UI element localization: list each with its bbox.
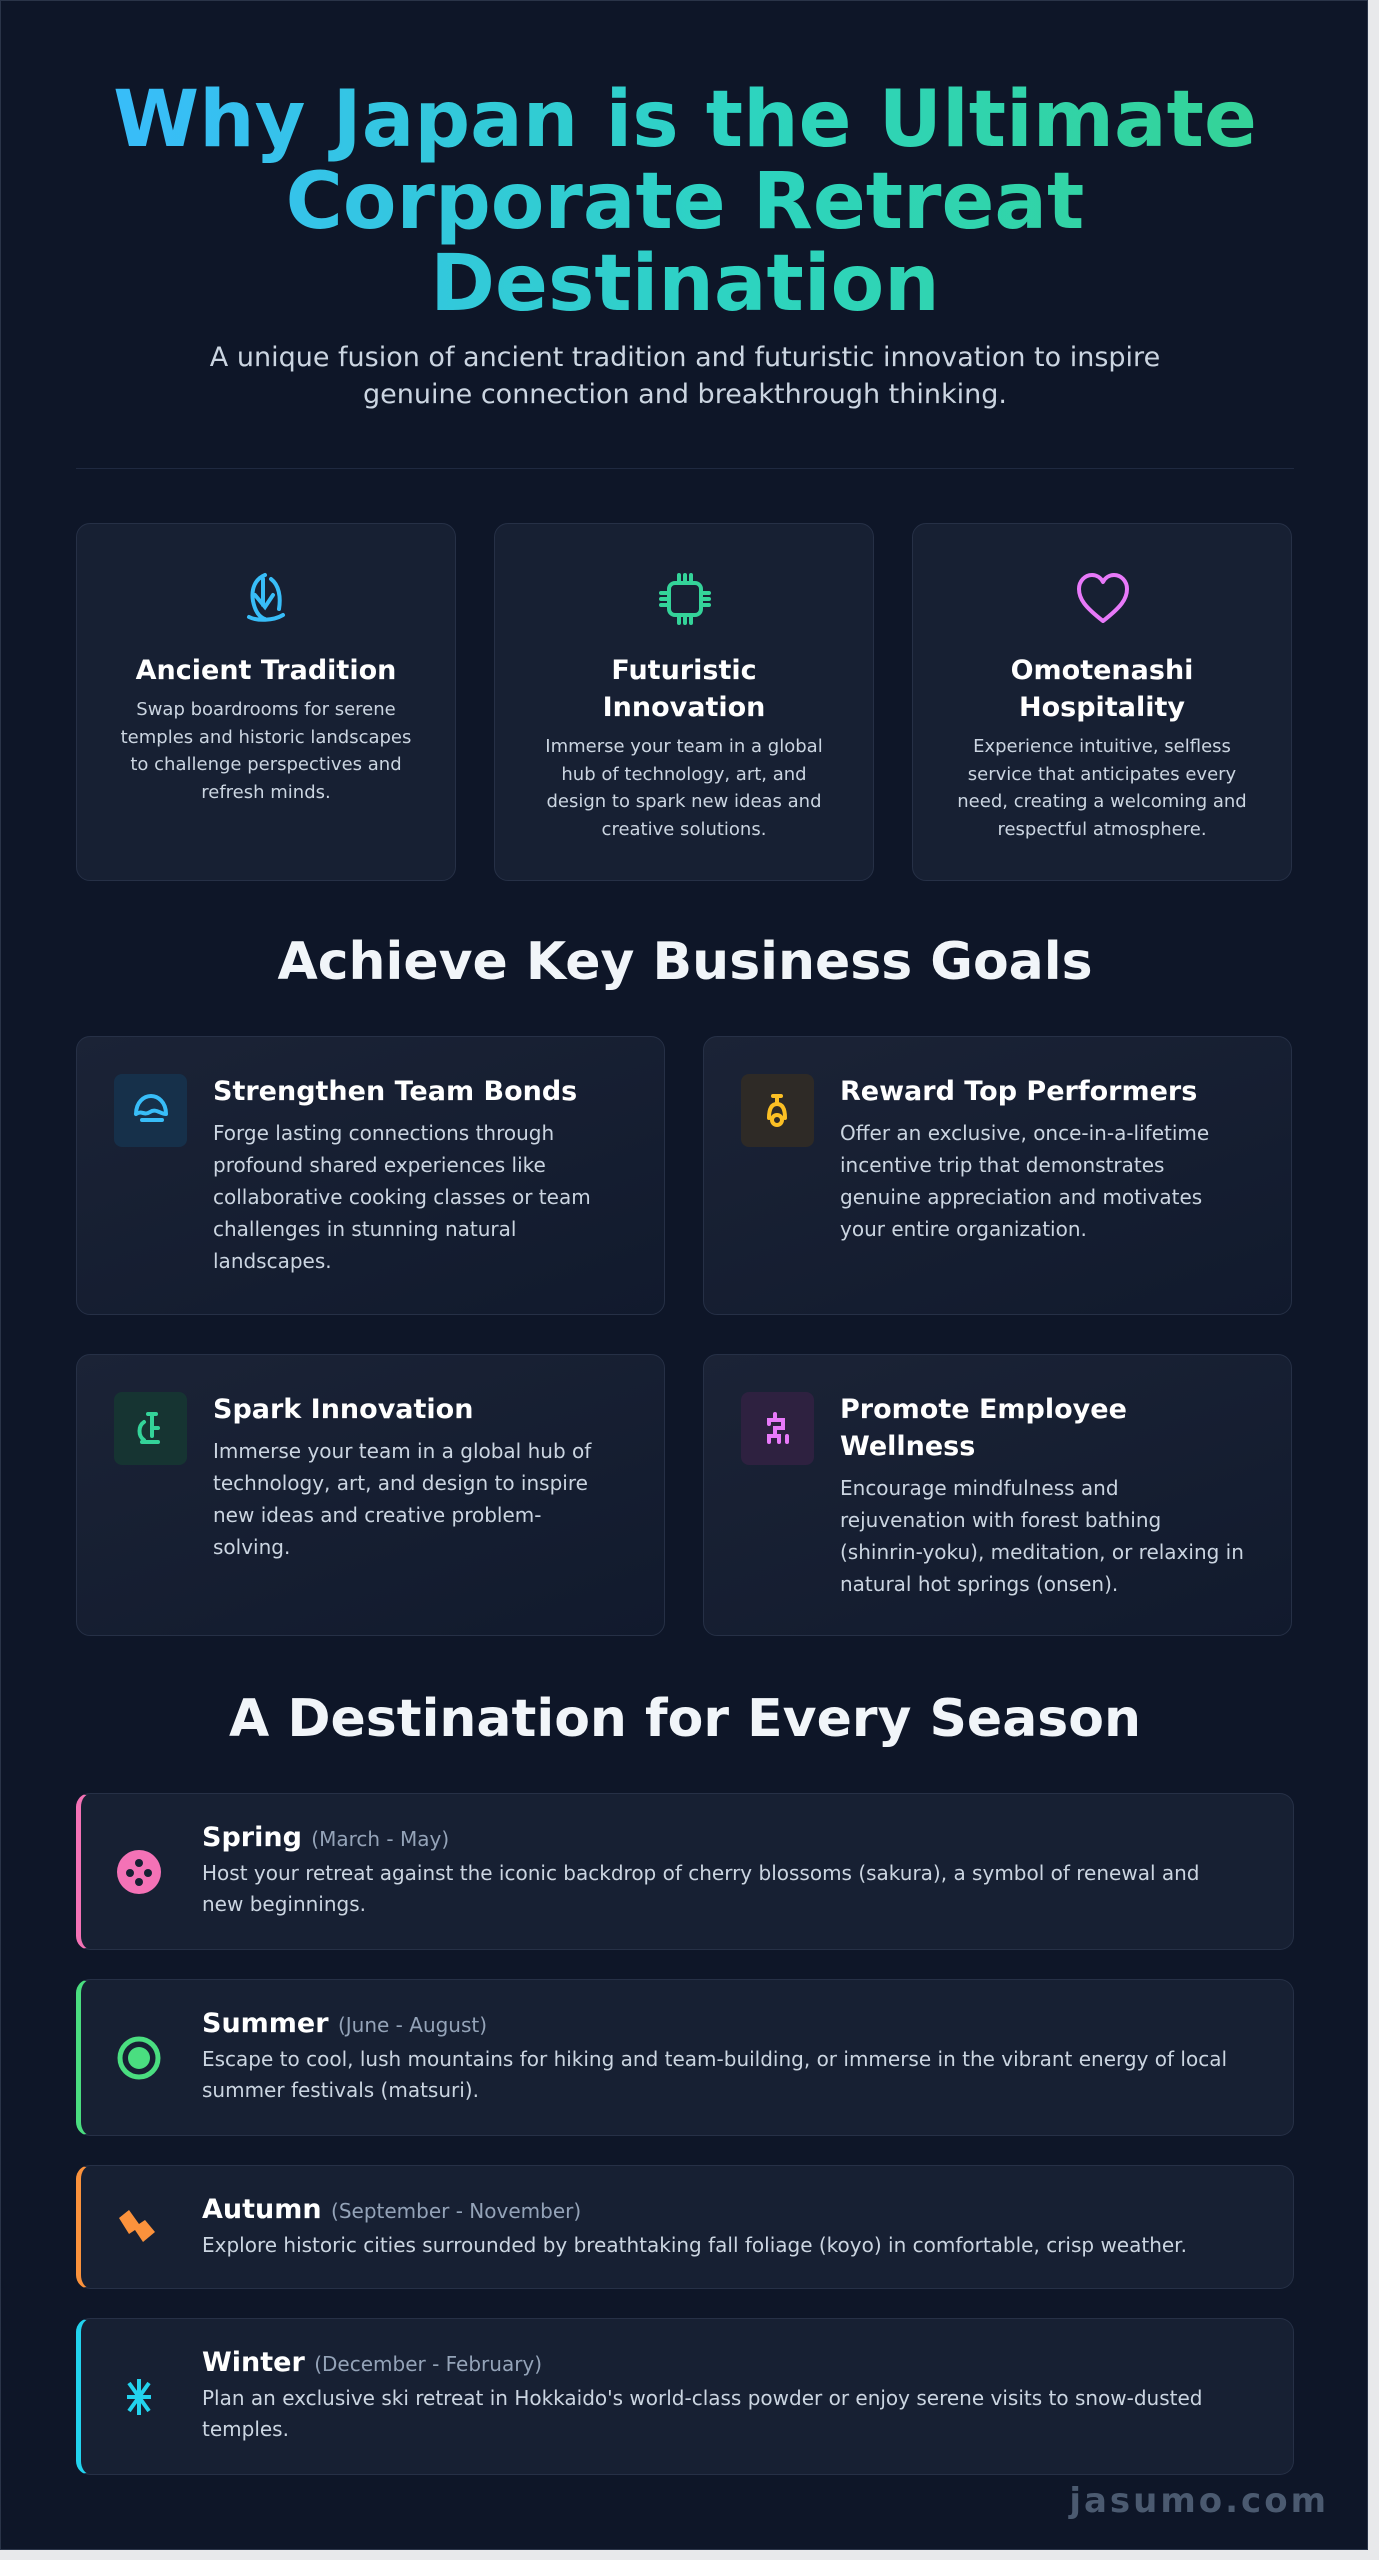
card: Ancient Tradition: Ancient Tradition [136,655,396,686]
title: Why Japan is the Ultimate [113,75,1257,165]
season: Summer: Summer (June - August) [202,2008,487,2039]
goal: Strengthen Team Bonds: Strengthen Team Bonds [213,1076,577,1107]
season: Spring: Host your retreat against the iconic backdrop of cherry blossoms (sakura), a symbol of renewal and new beginnings. [202,1861,1200,1916]
title: Destination [430,239,940,329]
goal: Spark Innovation: Immerse your team in a global hub of technology, art, and design to inspire new ideas and creative problem-solving. [213,1439,591,1559]
goal: Promote Employee Wellness [703,1354,1292,1636]
goal: Strengthen Team Bonds: Forge lasting connections through profound shared experiences like collaborative cooking classes or team challenges in stunning natural landscapes. [213,1121,591,1273]
card: Futuristic Innovation [494,523,874,881]
goal: Spark Innovation [76,1354,665,1636]
season: Summer [76,1979,1294,2136]
icon: wellness [741,1392,814,1465]
card: Ancient Tradition [76,523,456,881]
icon: chip [659,573,711,625]
title [1,79,1369,325]
watermark: jasumo.com [1069,2481,1329,2521]
goal: Promote Employee Wellness: Encourage mindfulness and [840,1476,1119,1500]
season: Winter [76,2318,1294,2475]
subtitle: genuine connection and breakthrough thinking. [363,379,1007,410]
card: Omotenashi Hospitality: Experience intuitive, selfless service that anticipates every need, creating a welcoming and respectful atmosphere. [957,736,1247,840]
season: Summer: Escape to cool, lush mountains for hiking and team-building, or immerse in the vibrant energy of local summer festivals (matsuri). [202,2047,1227,2102]
goal: Spark Innovation: Spark Innovation [213,1394,473,1425]
icon: sakura [117,1850,161,1894]
goal: Promote Employee Wellness: (shinrin-yoku), meditation, or relaxing in [840,1540,1244,1564]
title: Corporate Retreat [286,157,1084,247]
season: Autumn [76,2165,1294,2289]
season: Winter: Plan an exclusive ski retreat in Hokkaido's world-class powder or enjoy serene visits to snow-dusted temples. [202,2386,1202,2441]
goal: Promote Employee Wellness: natural hot springs (onsen). [840,1572,1118,1596]
card: Futuristic Innovation: Immerse your team in a global hub of technology, art, and design to spark new ideas and creative solutions. [545,736,823,840]
icon: heart [1077,573,1129,623]
icon: medal [741,1074,814,1147]
card: Futuristic Innovation: Futuristic [611,655,757,686]
card: Omotenashi Hospitality: Omotenashi [1011,655,1193,686]
icon: microscope [114,1392,187,1465]
icon: team [114,1074,187,1147]
subtitle: A unique fusion of ancient tradition and futuristic innovation to inspire [210,342,1160,373]
season: Autumn: Explore historic cities surrounded by breathtaking fall foliage (koyo) in comfortable, crisp weather. [202,2233,1187,2257]
heading: A Destination for Every Season: A Destination for Every Season [229,1689,1141,1749]
subtitle [210,342,1160,410]
card: Futuristic Innovation: Innovation [603,692,765,723]
goal: Promote Employee Wellness: Wellness [840,1431,975,1462]
season: Spring [76,1793,1294,1950]
icon: temple [246,572,286,622]
goal: Promote Employee Wellness: rejuvenation with forest bathing [840,1508,1161,1532]
goal: Strengthen Team Bonds [76,1036,665,1315]
card: Ancient Tradition: Swap boardrooms for serene temples and historic landscapes to challenge perspectives and refresh minds. [121,699,411,802]
card: Omotenashi Hospitality [912,523,1292,881]
icon: sun [118,2036,160,2080]
season: Spring: Spring (March - May) [202,1822,449,1853]
goal: Reward Top Performers [703,1036,1292,1315]
icon: snowflake [127,2379,151,2415]
card: Omotenashi Hospitality: Hospitality [1019,692,1185,723]
goal: Reward Top Performers: Offer an exclusive, once-in-a-lifetime incentive trip that demonstrates genuine appreciation and motivates your entire organization. [840,1121,1209,1241]
icon: leaf [119,2210,155,2242]
season: Winter: Winter (December - February) [202,2347,542,2378]
goal: Promote Employee Wellness: Promote Employee [840,1394,1127,1425]
goal: Reward Top Performers: Reward Top Performers [840,1076,1197,1107]
heading: Achieve Key Business Goals: Achieve Key Business Goals [277,932,1093,992]
season: Autumn: Autumn (September - November) [202,2194,581,2225]
